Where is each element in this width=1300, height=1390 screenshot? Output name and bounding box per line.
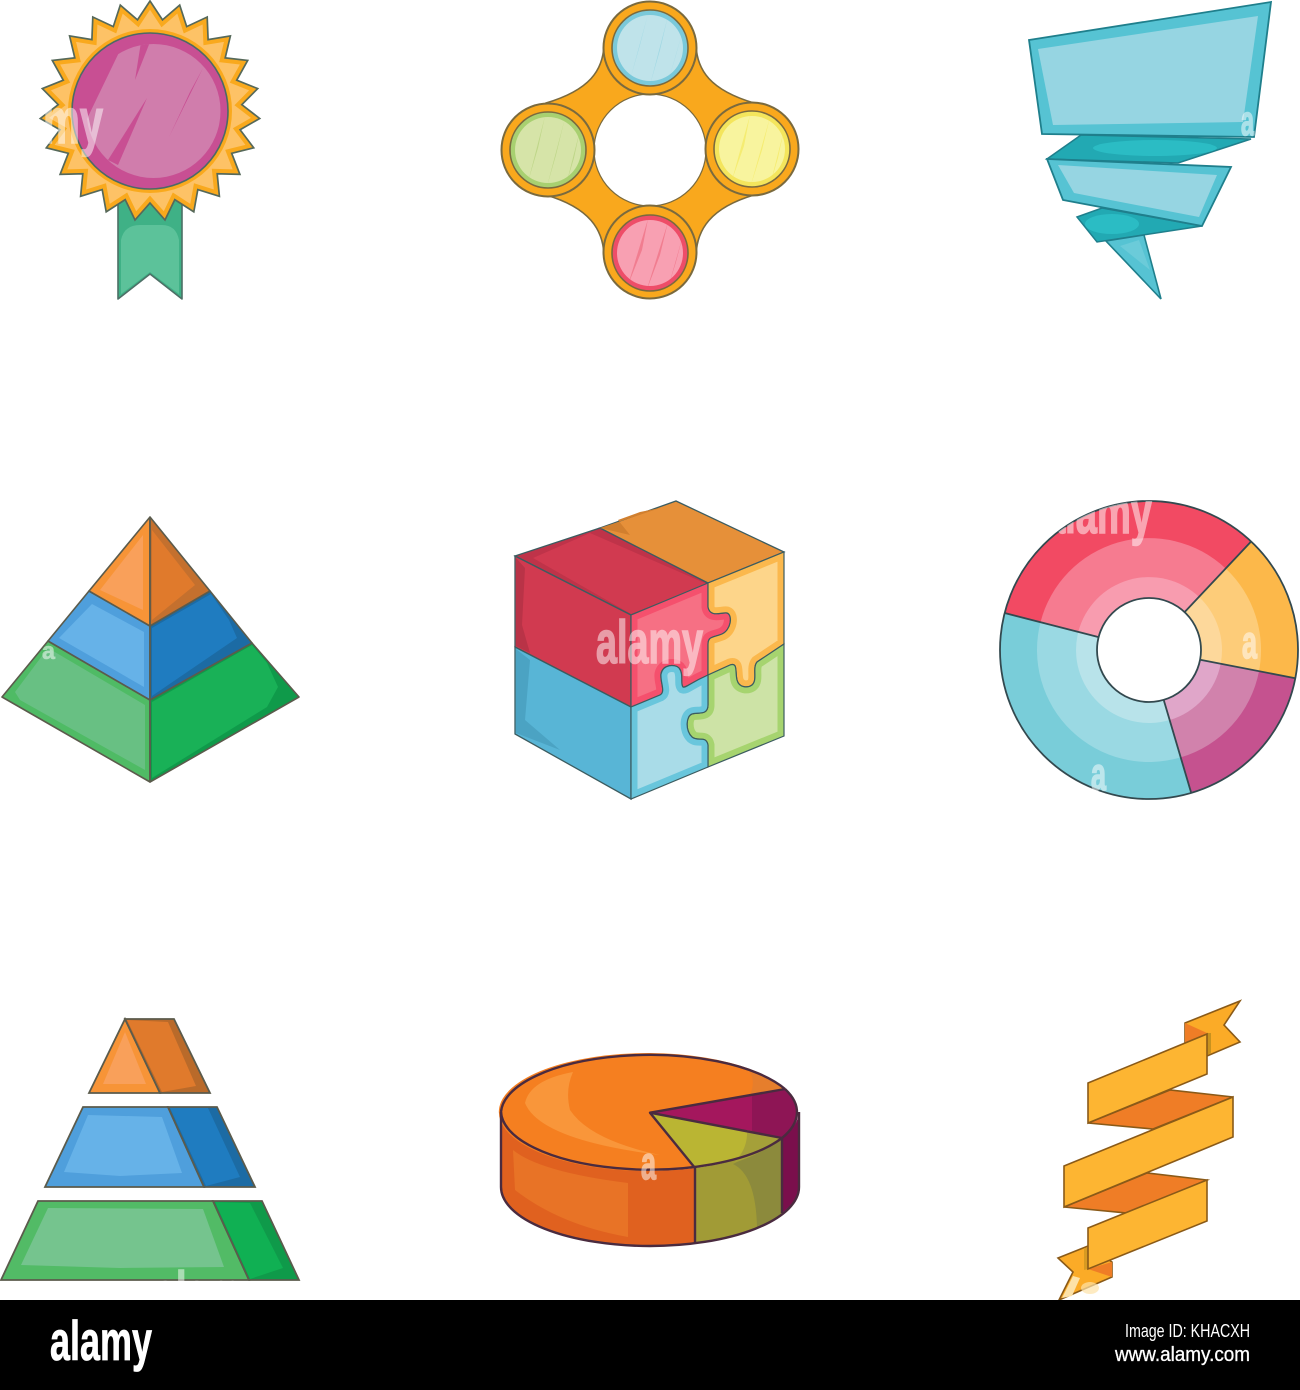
pyramid center axis (149, 517, 151, 782)
watermarks: alamy and a: a (1242, 616, 1257, 668)
spinner red circle (604, 206, 696, 298)
watermarks: alamy and a (1058, 501, 1258, 792)
icon: four-circle spinner diagram (502, 2, 798, 298)
icon: award rosette with ribbon (40, 1, 260, 299)
footer logo: alamy: alamy (50, 1309, 152, 1372)
pyramid blue layer (48, 591, 252, 700)
spinner yellow circle (706, 102, 798, 196)
footer url: www.alamy.com (1114, 1344, 1250, 1366)
banner tail (1106, 235, 1161, 299)
donut gold segment (1149, 542, 1298, 678)
rosette pink disc (72, 33, 228, 190)
watermarks: alamy and a: alamy (1044, 479, 1152, 546)
stepped pyramid orange tier (89, 1019, 210, 1093)
donut outlines and hole (1000, 501, 1298, 799)
watermark: a: a (1241, 97, 1254, 144)
chart: donut with four segments (1000, 479, 1298, 800)
ribbon panel three (1088, 1180, 1207, 1269)
icon: puzzle cube (515, 501, 784, 799)
spinner orange body (546, 45, 754, 255)
ribbon bottom tail (1058, 1246, 1112, 1300)
watermark: cropped alamy on stepped pyramid: alamy (155, 1260, 262, 1327)
pyramid green layer (2, 641, 299, 782)
donut blue segment (1000, 613, 1191, 799)
cube left lower face (515, 647, 631, 799)
chart: 3D pie (499, 1053, 799, 1246)
puzzle piece blue (631, 666, 708, 799)
icon: layered pyramid (2, 517, 299, 782)
puzzle piece red (631, 583, 730, 707)
ribbon top tail (1185, 1001, 1240, 1056)
pie side olive (695, 1138, 782, 1243)
ribbon fold two (1064, 1173, 1207, 1213)
icon: folded ribbon (1058, 1001, 1240, 1300)
cube left upper face (515, 556, 631, 707)
rosette gold star seal (40, 1, 260, 220)
cube top-left face (515, 528, 708, 615)
spinner green circle (502, 104, 594, 196)
pie outlines (501, 1055, 799, 1246)
pie side maroon (782, 1112, 799, 1213)
footer image id: Image ID: KHACXH (1125, 1321, 1250, 1341)
watermark: alamy: alamy (596, 609, 703, 676)
pie top orange (499, 1053, 785, 1171)
ribbon panel two (1064, 1097, 1233, 1207)
pie top magenta slice (650, 1089, 797, 1138)
spinner center hole (594, 94, 706, 206)
spinner blue circle (604, 2, 696, 94)
ribbon fold one (1088, 1090, 1233, 1129)
puzzle piece green (687, 644, 784, 767)
ribbon panel one (1088, 1034, 1207, 1123)
puzzle piece gold (708, 552, 784, 687)
rosette green ribbon (118, 198, 182, 299)
watermarks: alamy and a: a (1091, 748, 1106, 800)
banner middle panel (1047, 159, 1231, 226)
cube top-right face (600, 501, 784, 583)
donut red segment (1005, 501, 1251, 650)
donut pink segment (1149, 650, 1295, 793)
stepped pyramid blue tier (45, 1107, 255, 1187)
pie side orange (501, 1112, 695, 1246)
pyramid orange layer (89, 517, 210, 626)
footer bar (0, 1300, 1300, 1390)
stepped pyramid green tier (1, 1201, 299, 1280)
banner fold two (1077, 208, 1202, 242)
watermark: a: a (641, 1137, 656, 1189)
watermark: a: a (42, 638, 56, 665)
banner top panel (1029, 2, 1271, 137)
pie top olive slice (650, 1113, 782, 1168)
icon: folded paper banner (1029, 2, 1271, 299)
icon: separated stepped pyramid (1, 1019, 299, 1280)
banner fold one (1047, 135, 1251, 163)
watermark: my: my (43, 85, 103, 157)
